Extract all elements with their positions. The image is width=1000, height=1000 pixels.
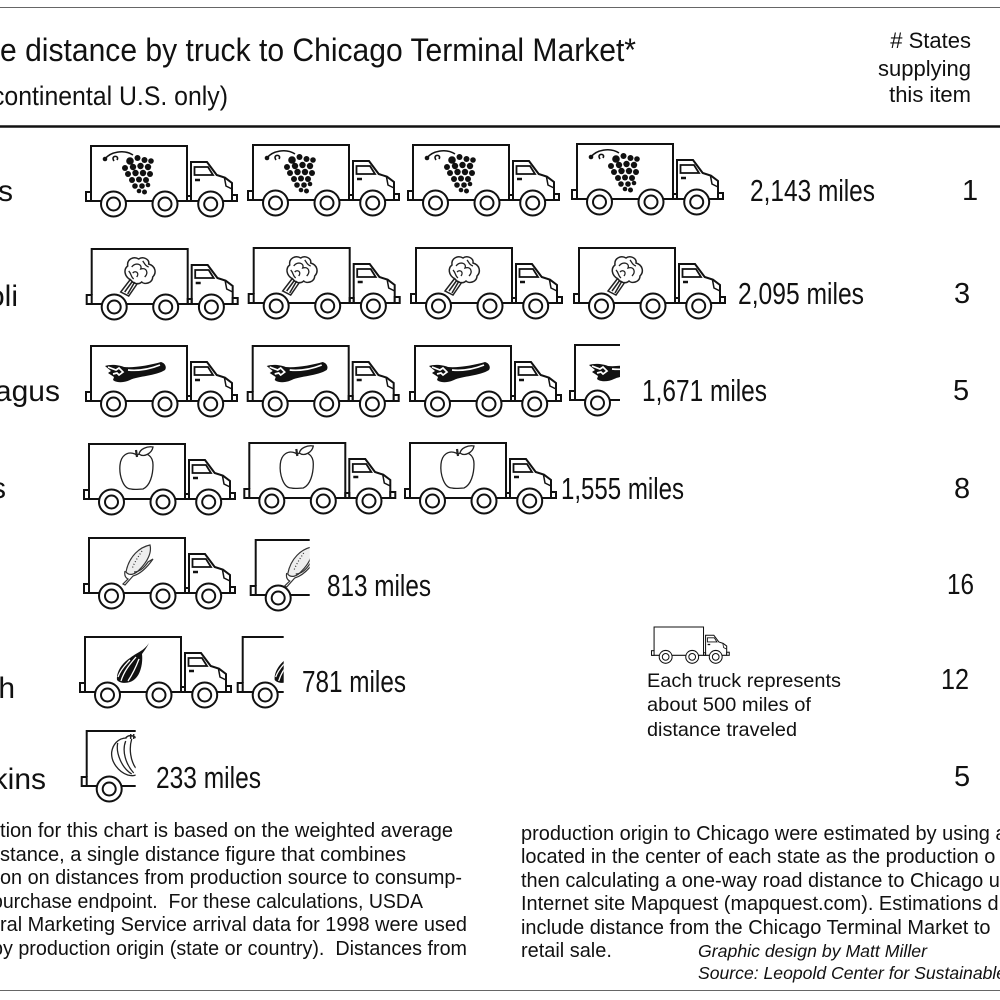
footnote: left column: on on distances from production source to consump- <box>0 867 462 889</box>
row: broccoli <box>0 248 970 320</box>
bottom rule <box>0 990 1000 992</box>
footnote: right column: then calculating a one-way road distance to Chicago u <box>521 870 1000 892</box>
distance: apples: 1,555 miles <box>561 471 684 506</box>
column heading: states supplying this item: this item <box>889 82 971 107</box>
legend text: Each truck represents <box>647 670 841 692</box>
state count: grapes: 1 <box>962 175 978 207</box>
footnote: left column: ral Marketing Service arrival data for 1998 were used <box>0 914 467 936</box>
truck icons: broccoli, 4 trucks <box>87 248 725 320</box>
footnote: right column: include distance from the Chicago Terminal Market to <box>521 917 990 939</box>
legend text <box>647 670 841 741</box>
column heading: states supplying this item: supplying <box>878 56 971 81</box>
title: e distance by truck to Chicago Terminal Market* <box>0 32 636 68</box>
legend text: about 500 miles of <box>647 694 812 716</box>
footnote: left column: tion for this chart is based on the weighted average <box>0 820 453 842</box>
truck icons: corn, 1.5 trucks <box>83 537 310 612</box>
credits: Graphic design by Matt Miller <box>698 941 928 961</box>
legend: truck scale <box>647 627 841 741</box>
credits: Source: Leopold Center for Sustainable <box>698 963 1000 983</box>
row: asparagus <box>0 345 969 416</box>
column heading: states supplying this item <box>878 28 971 107</box>
footnote: right column: retail sale. <box>521 940 612 962</box>
distance: asparagus: 1,671 miles <box>642 373 767 408</box>
truck icons: grapes, 4 trucks <box>86 144 723 216</box>
distance: corn: 813 miles <box>327 568 431 603</box>
footnote: left column: stance, a single distance figure that combines <box>0 844 406 866</box>
icon: legend truck <box>652 627 729 663</box>
truck icons: asparagus, 3.5 trucks <box>85 344 620 418</box>
footnote: right column: located in the center of each state as the production o <box>521 846 995 868</box>
footnote: right column: production origin to Chicago were estimated by using a <box>521 823 1000 845</box>
state count: broccoli: 3 <box>954 278 970 310</box>
row: squash <box>0 637 969 708</box>
footnote: right column: Internet site Mapquest (mapquest.com). Estimations d <box>521 893 999 915</box>
row: pumpkins <box>0 731 970 802</box>
footnote: right column <box>521 823 1000 962</box>
credits <box>698 941 1000 983</box>
top rule <box>0 6 1000 8</box>
state count: pumpkins: 5 <box>954 761 970 793</box>
distance: squash: 781 miles <box>302 664 406 699</box>
state count: asparagus: 5 <box>953 375 969 407</box>
legend text: distance traveled <box>647 719 797 741</box>
truck icons: squash, 1.5 trucks <box>79 636 284 708</box>
row: apples <box>0 443 970 514</box>
footnote: left column <box>0 820 467 960</box>
distance: pumpkins: 233 miles <box>156 760 261 795</box>
header rule <box>0 125 1000 128</box>
truck icons: apples, 3 trucks <box>84 443 556 514</box>
row: grapes <box>0 144 978 216</box>
state count: corn: 16 <box>947 569 974 601</box>
footnote: left column: by production origin (state or country). Distances from <box>0 938 467 960</box>
state count: squash: 12 <box>941 664 969 696</box>
state count: apples: 8 <box>954 473 970 505</box>
distance: grapes: 2,143 miles <box>750 173 875 208</box>
row: corn <box>84 538 974 610</box>
column heading: states supplying this item: # States <box>890 28 971 53</box>
truck icon: pumpkins, partial truck <box>80 730 136 802</box>
distance: broccoli: 2,095 miles <box>738 276 864 311</box>
footnote: left column: purchase endpoint. For these calculations, USDA <box>0 891 424 913</box>
